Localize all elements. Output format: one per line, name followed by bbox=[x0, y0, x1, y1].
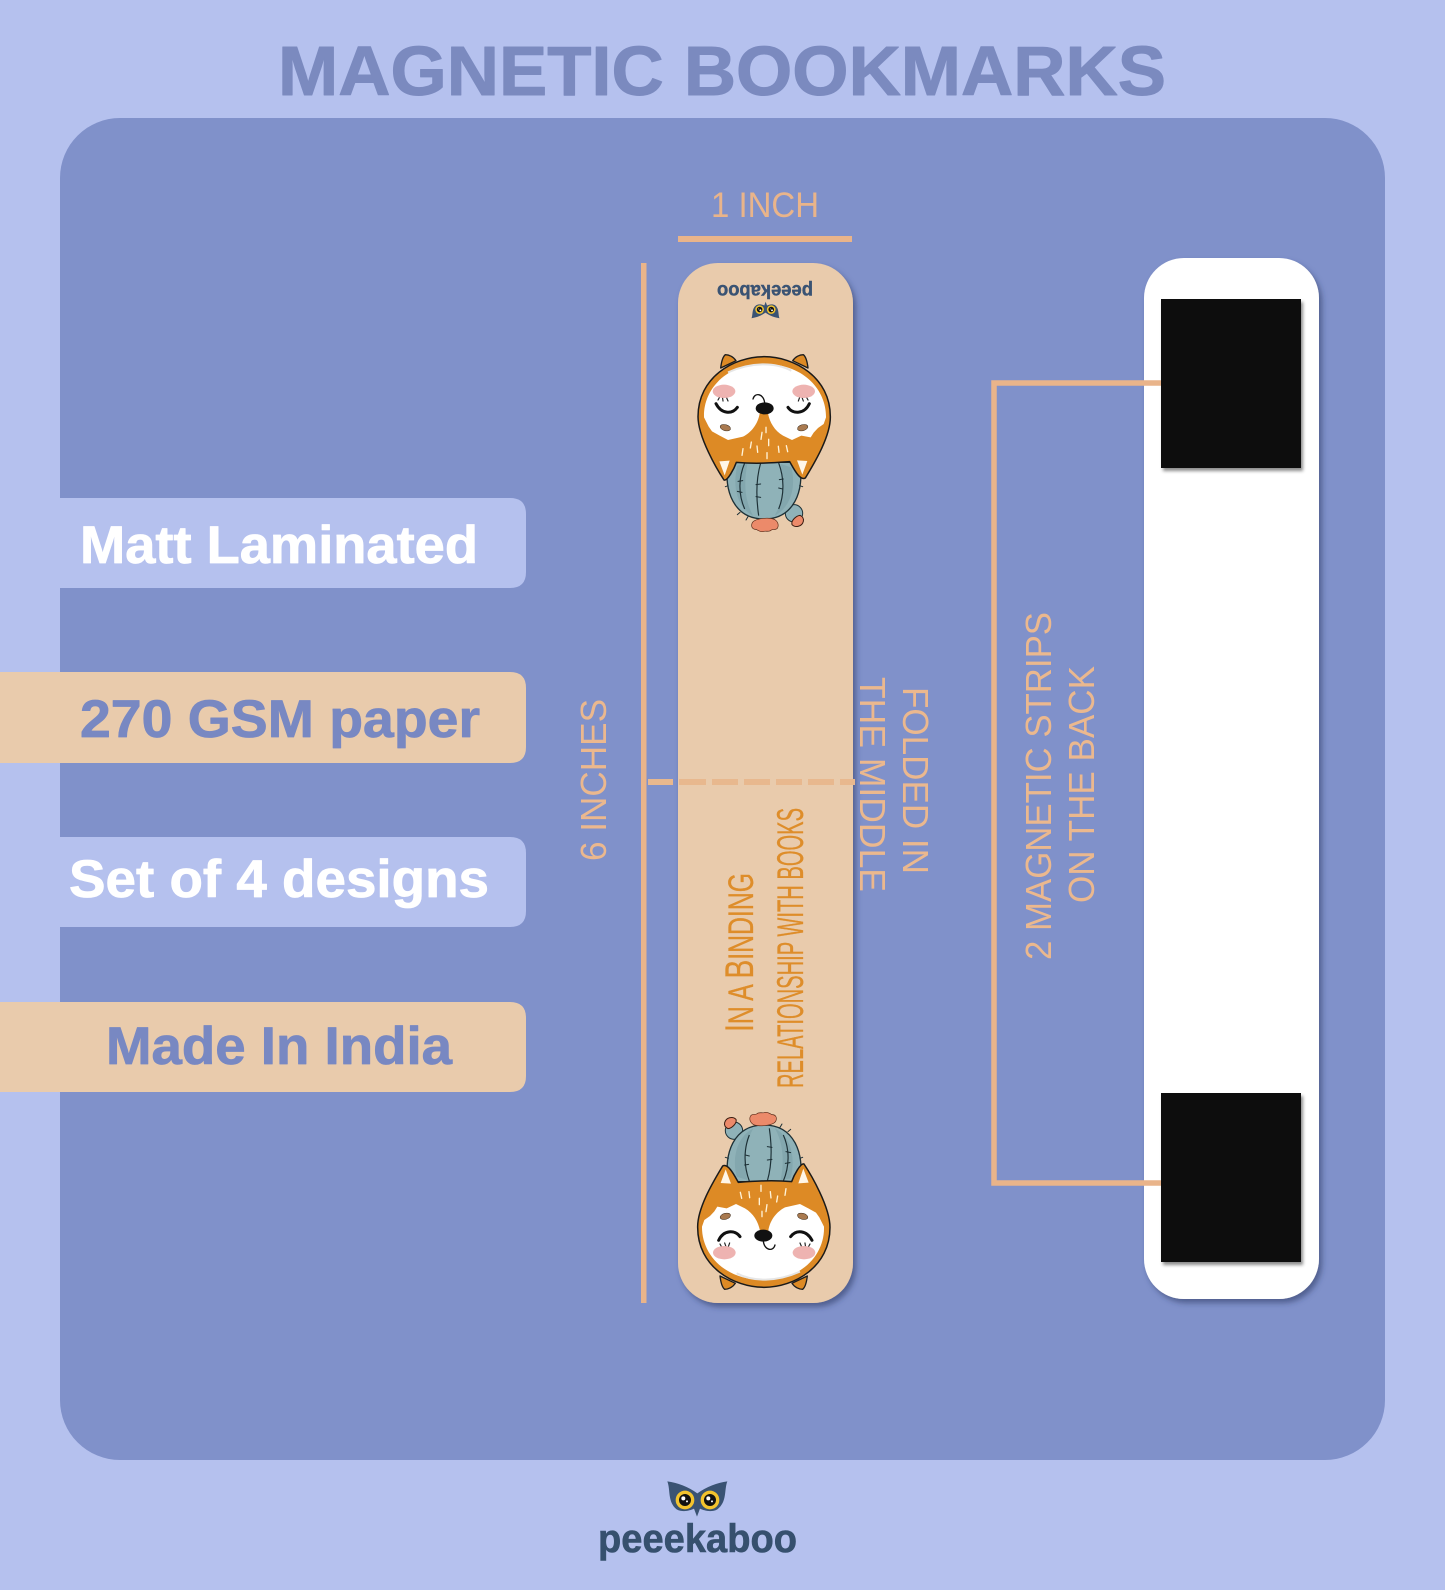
label: on the back: ON THE BACK bbox=[1061, 666, 1102, 903]
bookmark: back bbox=[1144, 258, 1319, 1299]
back card bbox=[1144, 258, 1319, 1299]
title: MAGNETIC BOOKMARKS bbox=[278, 32, 1166, 110]
fold line bbox=[648, 779, 855, 785]
dimension: 1 inch line bbox=[678, 236, 852, 242]
owl icon bbox=[667, 1481, 727, 1517]
small owl logo bbox=[752, 302, 779, 318]
illustration: top fox with cactus bbox=[698, 355, 830, 532]
label: Made In India bbox=[0, 1002, 526, 1092]
label: Matt Laminated: Matt Laminated bbox=[80, 516, 478, 575]
dimension: 6 inches label: 6 INCHES bbox=[573, 699, 614, 861]
bookmark card bbox=[678, 263, 853, 1303]
label: folded in: FOLDED IN bbox=[895, 687, 936, 874]
magnetic strip: bottom bbox=[1161, 1093, 1301, 1262]
dimension: 1 inch label: 1 INCH bbox=[711, 186, 819, 225]
bookmark: front bbox=[678, 263, 853, 1303]
brand logo bbox=[598, 1481, 797, 1561]
small brand wordmark: peeekaboo bbox=[717, 280, 813, 301]
label: the middle: THE MIDDLE bbox=[852, 677, 893, 892]
label: Set of 4 designs: Set of 4 designs bbox=[69, 850, 489, 909]
magnetic strip: top bbox=[1161, 299, 1301, 468]
quote: second line: RELATIONSHIP WITH BOOKS bbox=[770, 808, 811, 1088]
connector bracket bbox=[994, 383, 1161, 1183]
panel: main background panel bbox=[60, 118, 1385, 1460]
label: Made In India: Made In India bbox=[106, 1017, 453, 1076]
label: Set of 4 designs bbox=[60, 837, 526, 927]
quote: first line: IN A BINDING bbox=[718, 873, 762, 1032]
brand wordmark: peeekaboo bbox=[598, 1517, 797, 1561]
illustration: bottom fox with cactus bbox=[698, 1112, 830, 1289]
label: 2 magnetic strips: 2 MAGNETIC STRIPS bbox=[1018, 612, 1059, 960]
dimension: 6 inches line bbox=[641, 263, 646, 1303]
label: 270 GSM paper bbox=[0, 672, 526, 763]
label: 270 GSM paper: 270 GSM paper bbox=[80, 690, 480, 749]
label: Matt Laminated bbox=[60, 498, 526, 588]
